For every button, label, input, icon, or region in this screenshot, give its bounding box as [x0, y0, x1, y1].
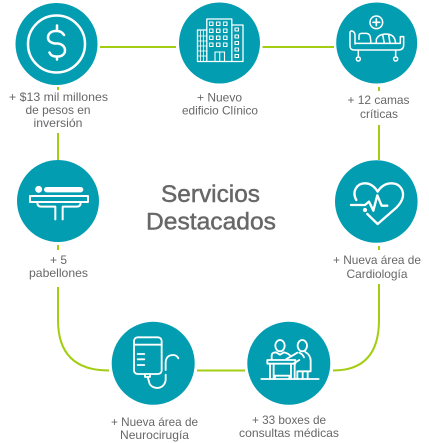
- label: consultation boxes: [239, 413, 339, 440]
- label: consultation boxes: consultas médicas: [239, 426, 339, 440]
- label: critical beds: [348, 93, 410, 121]
- icon: IV bag: [134, 337, 178, 388]
- icon: doctor and patient: [261, 340, 319, 379]
- label: investment: [9, 90, 108, 130]
- label: cardiology: + Nueva área de: [333, 253, 421, 267]
- icon: buildings: [198, 19, 243, 62]
- label: cardiology: Cardiología: [346, 267, 408, 281]
- label: new clinical building: [182, 90, 258, 118]
- label: new clinical building: edificio Clínico: [182, 104, 258, 118]
- item: neurosurgery: [111, 322, 198, 442]
- label: investment: de pesos en: [26, 103, 90, 117]
- item: consultation boxes: [239, 322, 339, 440]
- label: investment: + $13 mil millones: [9, 90, 108, 104]
- connector lines: [58, 47, 379, 370]
- label: operating rooms: + 5: [50, 253, 67, 267]
- item: new clinical building: [179, 2, 260, 118]
- title: Destacados: [146, 208, 276, 236]
- item: investment: [9, 3, 108, 130]
- icon: hospital bed: [350, 16, 404, 61]
- label: neurosurgery: Neurocirugía: [120, 428, 189, 442]
- icon: dollar coin: [28, 16, 85, 72]
- item: operating rooms: [17, 160, 99, 280]
- label: consultation boxes: + 33 boxes de: [252, 413, 326, 427]
- label: neurosurgery: [111, 415, 198, 442]
- label: new clinical building: + Nuevo: [197, 90, 242, 104]
- label: critical beds: + 12 camas: [348, 93, 410, 107]
- item: cardiology: [333, 160, 421, 281]
- label: operating rooms: [29, 253, 88, 280]
- label: neurosurgery: + Nueva área de: [111, 415, 198, 429]
- label: investment: inversión: [34, 116, 82, 130]
- label: critical beds: críticas: [360, 107, 398, 121]
- label: operating rooms: pabellones: [29, 266, 88, 280]
- item: critical beds: [336, 2, 417, 121]
- icon: heart with pulse: [351, 183, 403, 224]
- title: Servicios: [161, 181, 260, 208]
- icon: operating table: [30, 186, 88, 219]
- title: [146, 181, 276, 236]
- label: cardiology: [333, 253, 421, 281]
